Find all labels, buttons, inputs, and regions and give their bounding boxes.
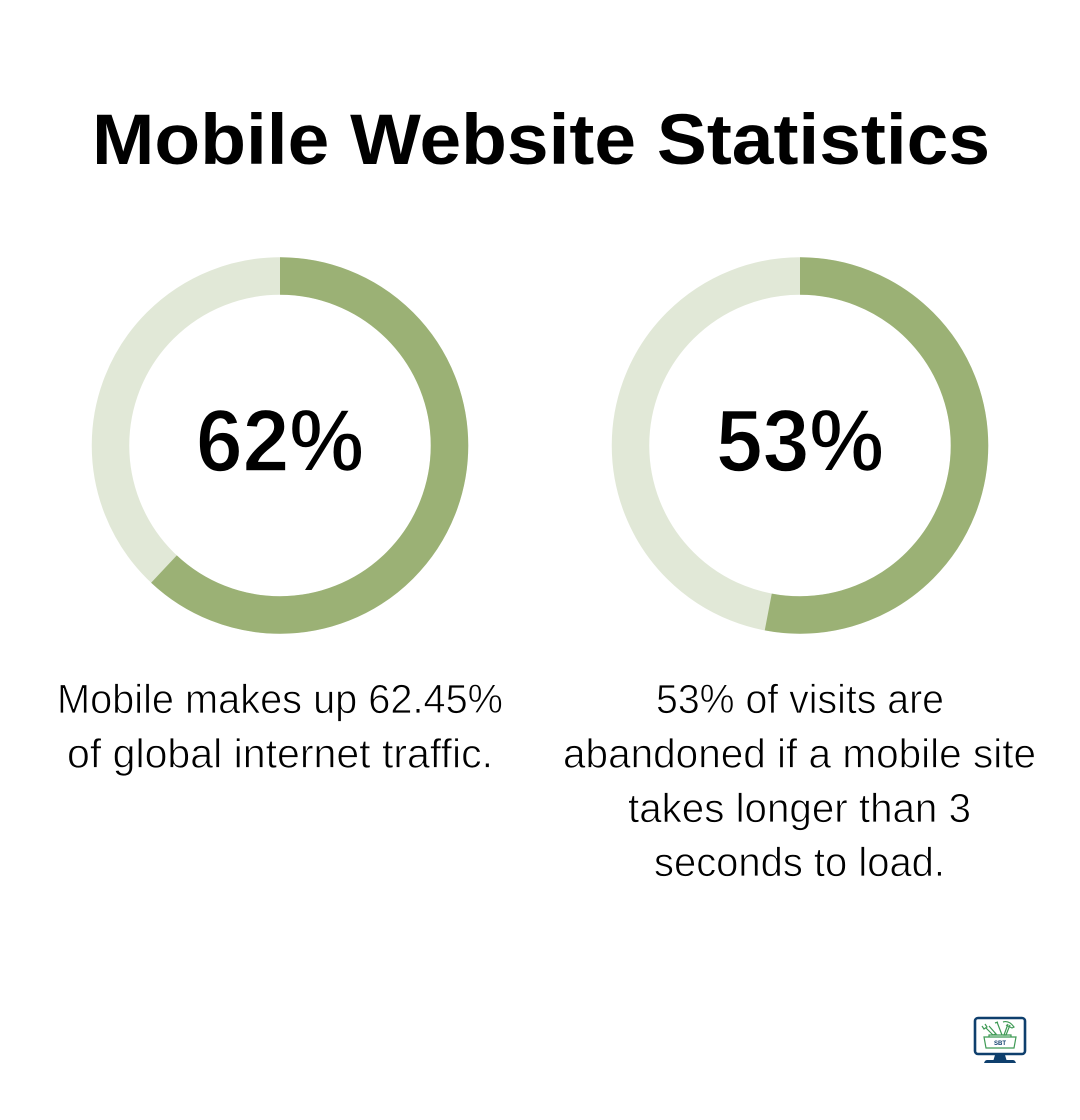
donut chart: 62%: [110, 276, 450, 615]
caption: abandoned visits: seconds to load.: [654, 839, 945, 885]
caption: abandoned visits: 53% of visits are: [656, 676, 944, 722]
caption: mobile traffic: Mobile makes up 62.45%: [57, 676, 503, 722]
caption: abandoned visits: takes longer than 3: [628, 785, 971, 831]
caption: abandoned visits: [563, 676, 1036, 885]
caption: abandoned visits: abandoned if a mobile site: [563, 730, 1036, 776]
value: 62%: 62%: [196, 391, 364, 490]
caption: mobile traffic: of global internet traffic.: [67, 730, 493, 776]
value: 53%: 53%: [716, 391, 884, 490]
icon: monitor logo with toolbox: [975, 1018, 1025, 1063]
title: Mobile Website Statistics: [92, 101, 990, 180]
caption: mobile traffic: [57, 676, 503, 776]
icon: monitor logo with toolbox: SBT: [994, 1041, 1006, 1047]
donut chart: 53%: [630, 276, 970, 615]
